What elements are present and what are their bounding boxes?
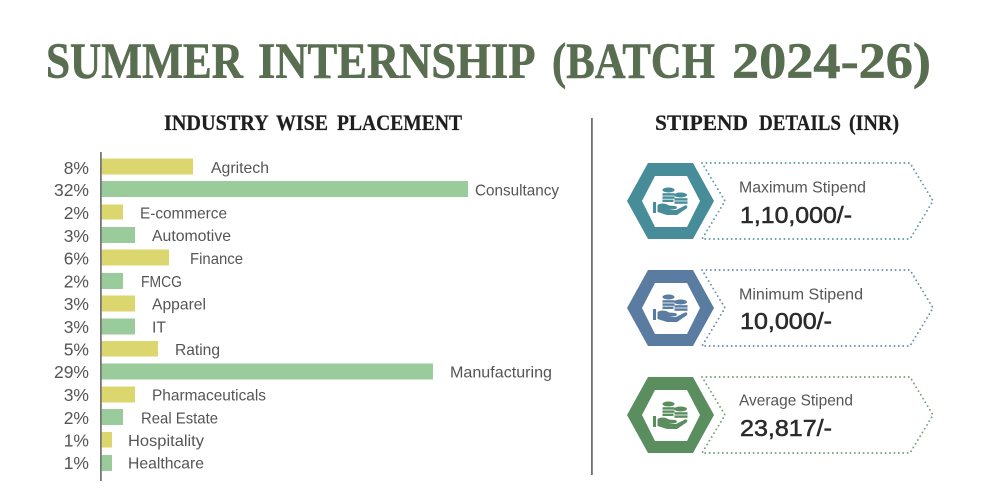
bar row: FMCG 2%: 2% (64, 272, 89, 292)
bar row: Hospitality 1%: Hospitality (128, 433, 204, 450)
dotted arrow outline (702, 377, 933, 453)
bar row: Manufacturing 29%: Manufacturing (450, 364, 552, 382)
icon: hexagon with coins in hand (627, 163, 714, 239)
value: 23,817/- (740, 415, 832, 441)
bar row: Apparel 3%: 3% (64, 294, 89, 314)
heading: stipend details: DETAILS (759, 110, 841, 135)
bar row: E-commerce 2% (64, 203, 227, 223)
bar row: Automotive 3%: 3% (64, 226, 89, 246)
icon: hexagon with coins in hand (627, 270, 714, 346)
title: 2024-26) (732, 34, 931, 90)
bar row: Agritech 8%: Agritech (211, 160, 269, 177)
bar row: FMCG 2%: FMCG (141, 274, 182, 291)
bar row: Healthcare 1%: Healthcare (128, 456, 204, 472)
bar row: Consultancy 32%: Consultancy (475, 182, 559, 200)
bar row: Rating 5%: Rating (175, 342, 220, 359)
card: average stipend (627, 377, 933, 453)
bar row: Pharmaceuticals 3%: 3% (64, 385, 89, 405)
chart axis (100, 152, 102, 481)
title: (BATCH (552, 34, 715, 90)
bar row: Real Estate 2%: Real Estate (141, 410, 218, 428)
bar row: Automotive 3% (64, 226, 231, 246)
bar row: Manufacturing 29% (54, 362, 552, 382)
title: SUMMER (46, 34, 244, 90)
bar row: E-commerce 2%: E-commerce (140, 206, 227, 222)
bar row: Finance 6% (64, 248, 243, 268)
bar row: Rating 5% (64, 340, 220, 360)
heading: industry wise placement: INDUSTRY (164, 110, 269, 135)
label: Minimum Stipend (739, 286, 863, 304)
bar row: Healthcare 1% (64, 453, 204, 473)
bar row: Rating 5%: 5% (64, 340, 89, 360)
bar row: Real Estate 2% (64, 408, 218, 428)
bar row: Agritech 8%: 8% (64, 158, 89, 178)
bar row: Hospitality 1%: 1% (64, 430, 89, 450)
heading: stipend details: STIPEND (655, 110, 748, 135)
heading: industry wise placement: WISE (276, 110, 328, 135)
value: 10,000/- (740, 308, 832, 334)
icon: hexagon with coins in hand (627, 377, 714, 453)
bar chart: industry wise placement (54, 152, 559, 481)
dotted arrow outline (702, 270, 933, 346)
bar row: Real Estate 2%: 2% (64, 408, 89, 428)
bar row: IT 3% (64, 317, 166, 337)
bar row: Apparel 3%: Apparel (152, 296, 206, 314)
bar row: Agritech 8% (64, 158, 269, 178)
label: Average Stipend (739, 392, 853, 410)
label: Maximum Stipend (739, 180, 866, 196)
bar row: E-commerce 2%: 2% (64, 203, 89, 223)
bar row: Pharmaceuticals 3% (64, 385, 266, 405)
bar row: Consultancy 32%: 32% (54, 180, 89, 200)
value: 1,10,000/- (740, 202, 852, 228)
heading: industry wise placement: PLACEMENT (337, 110, 462, 135)
card: maximum stipend (627, 163, 933, 239)
bar row: FMCG 2% (64, 272, 182, 292)
divider between panels (591, 118, 593, 475)
dotted arrow outline (702, 163, 933, 239)
bar row: IT 3%: 3% (64, 317, 89, 337)
bar row: Consultancy 32% (54, 180, 559, 200)
bar row: IT 3%: IT (152, 320, 166, 336)
heading: stipend details: (INR) (849, 110, 899, 135)
card: minimum stipend (627, 270, 933, 346)
bar row: Pharmaceuticals 3%: Pharmaceuticals (152, 388, 266, 404)
bar row: Healthcare 1%: 1% (64, 453, 89, 473)
bar row: Manufacturing 29%: 29% (54, 362, 89, 382)
bar row: Finance 6%: Finance (190, 251, 243, 268)
bar row: Apparel 3% (64, 294, 206, 314)
bar row: Finance 6%: 6% (64, 248, 89, 268)
bar row: Automotive 3%: Automotive (152, 228, 231, 245)
bar row: Hospitality 1% (64, 430, 204, 450)
title: INTERNSHIP (258, 34, 534, 90)
